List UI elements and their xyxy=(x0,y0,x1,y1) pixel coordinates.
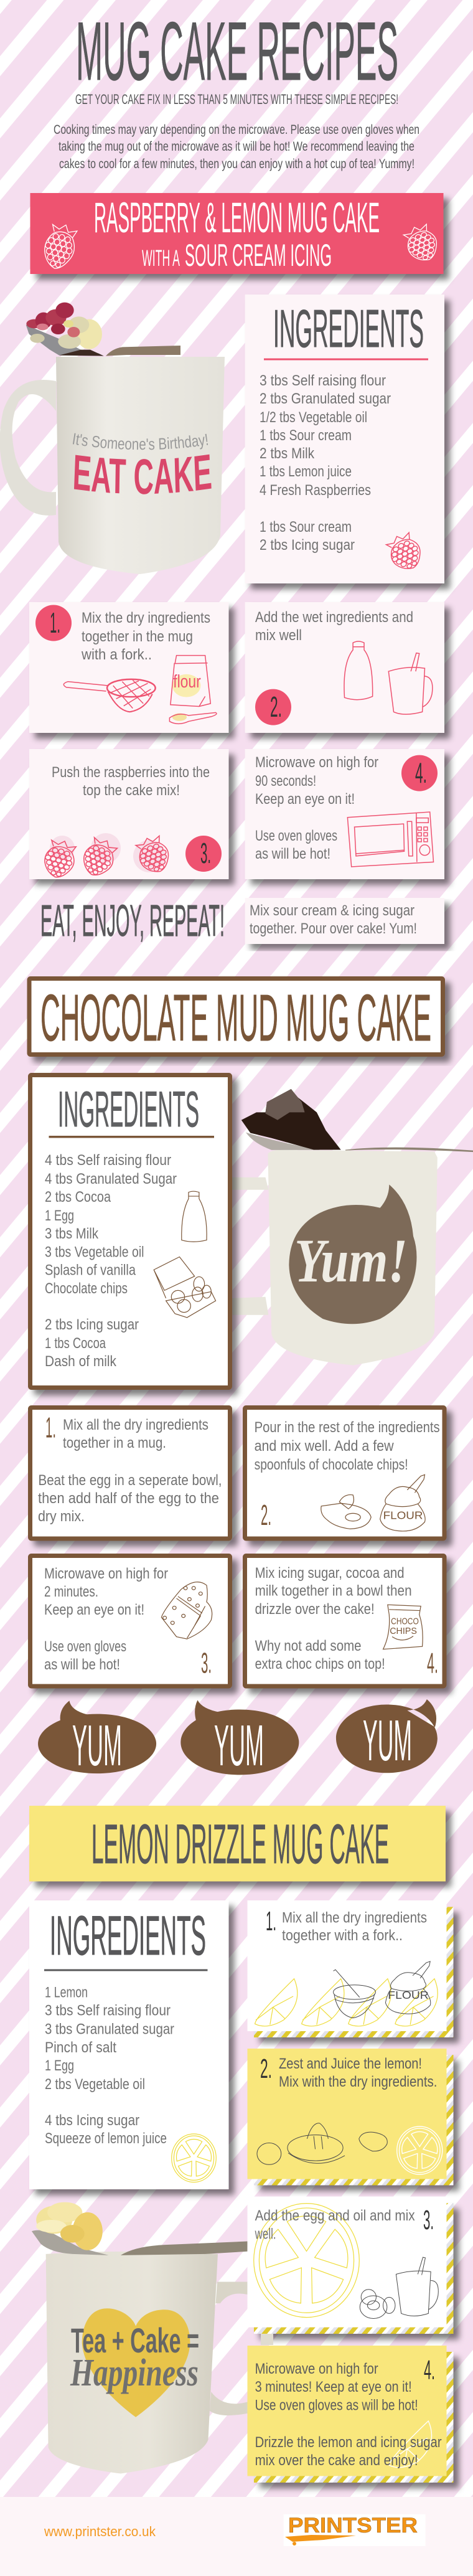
panel: step 3 xyxy=(29,749,229,880)
step text xyxy=(255,1419,440,1473)
icon: white lemon wedge xyxy=(389,2421,432,2468)
panel: chocolate step 4: 4. xyxy=(427,1647,438,1679)
panel: chocolate step 2: 2. xyxy=(261,1499,271,1531)
step text: together with a fork.. xyxy=(282,1927,403,1944)
step text: top the cake mix! xyxy=(83,782,180,799)
step number 4 xyxy=(401,755,438,791)
ingredient list: 2 tbs Vegetable oil xyxy=(45,2076,145,2093)
ingredient list: 1 tbs Sour cream xyxy=(260,427,352,444)
step text: together in the mug xyxy=(82,628,193,645)
step text: Use oven gloves xyxy=(255,828,337,844)
icon: spoon xyxy=(169,712,217,724)
ingredient list: 3 tbs Self raising flour xyxy=(45,2003,171,2019)
ingredient list: 1 tbs Lemon juice xyxy=(260,463,352,480)
step text xyxy=(282,1909,427,1944)
yum bubble 2: YUM xyxy=(214,1713,264,1778)
icons: lemon wedges, bowl, flour: FLOUR xyxy=(388,1989,429,2002)
panel: chocolate banner xyxy=(29,979,443,1055)
icon: sieve xyxy=(63,679,156,712)
panel: lemon step 1 xyxy=(248,1900,453,2037)
intro paragraph xyxy=(54,123,419,171)
panel: lemon step 2 xyxy=(248,2049,453,2186)
step text: 90 seconds! xyxy=(255,773,316,790)
step text: mix over the cake and enjoy! xyxy=(255,2452,418,2469)
mug: eat cake: EAT CAKE xyxy=(74,455,212,494)
yum bubble 1: YUM xyxy=(72,1713,122,1778)
step text xyxy=(255,754,378,862)
icon: raspberry right xyxy=(401,221,443,266)
panel: lemon step 4 xyxy=(248,2346,453,2483)
step text: as will be hot! xyxy=(44,1656,120,1673)
ingredient list: 1 Egg xyxy=(45,2057,74,2074)
website url: www.printster.co.uk xyxy=(44,2524,156,2539)
ingredient list: 3 tbs Milk xyxy=(45,1225,99,1242)
icon: oven glove xyxy=(161,1582,212,1639)
mug text: tea plus cake equals: Tea + Cake = xyxy=(71,2321,199,2360)
icon: microwave xyxy=(347,812,434,867)
step text: Mix all the dry ingredients xyxy=(63,1417,208,1433)
step text: Microwave on high for xyxy=(255,2361,378,2377)
mug text: happiness: Happiness xyxy=(70,2352,199,2394)
panel: step 2 xyxy=(245,602,444,733)
step text xyxy=(279,2055,437,2090)
panel: raspberry ingredients xyxy=(245,295,444,583)
step text: Microwave on high for xyxy=(44,1565,168,1582)
ingredient list: 1 Egg xyxy=(45,1207,74,1224)
ingredient list: 1 tbs Cocoa xyxy=(45,1335,106,1352)
step number 2: 2. xyxy=(270,691,282,723)
ingredient list: 4 Fresh Raspberries xyxy=(260,482,371,499)
icon: choco chips bag xyxy=(383,1605,423,1649)
mug: eat cake xyxy=(0,303,225,574)
icons: juicer and lemon xyxy=(257,2123,387,2164)
step text: mix well xyxy=(255,627,302,644)
ingredient list: 4 tbs Granulated Sugar xyxy=(45,1171,177,1187)
panel: chocolate step 1: 1. xyxy=(45,1411,56,1443)
step text: drizzle over the cake! xyxy=(255,1601,375,1618)
step text xyxy=(255,2207,415,2243)
step text: Add the wet ingredients and xyxy=(255,609,413,626)
ingredient list: 4 tbs Icing sugar xyxy=(45,2112,139,2129)
ingredient list: 2 tbs Icing sugar xyxy=(45,1316,139,1333)
logo: printster: PRINTSTER xyxy=(288,2514,418,2537)
panel: chocolate ingredients xyxy=(30,1075,230,1387)
icon: flour bag xyxy=(171,656,210,706)
step number 1: 1. xyxy=(50,606,60,639)
step text: Add the egg and oil and mix xyxy=(255,2207,415,2224)
step number 3: 3. xyxy=(200,837,211,869)
panel: icing note: together. Pour over cake! Yum! xyxy=(250,920,417,937)
step text: dry mix. xyxy=(38,1508,85,1525)
yum bubble 1 xyxy=(38,1701,156,1778)
ingredient list: 4 tbs Self raising flour xyxy=(45,1152,171,1169)
step text: and mix well. Add a few xyxy=(255,1438,394,1455)
step text xyxy=(81,610,210,663)
speech bubble xyxy=(289,1184,416,1324)
panel: chocolate step 3 xyxy=(30,1555,230,1686)
step text: Mix with the dry ingredients. xyxy=(279,2074,437,2090)
subheading: with a sour cream icing: WITH A xyxy=(142,245,180,271)
panel: lemon step 1: 1. xyxy=(266,1906,276,1937)
ingredient list: Dash of milk xyxy=(45,1353,117,1370)
ingredient list: 1/2 tbs Vegetable oil xyxy=(260,409,367,426)
panel: lemon step 3: 3. xyxy=(423,2205,434,2235)
icon: cracked egg xyxy=(321,1495,371,1529)
step text: Use oven gloves xyxy=(44,1638,126,1655)
step text: together in a mug. xyxy=(63,1435,166,1451)
ingredient list: 2 tbs Milk xyxy=(260,445,315,462)
panel: lemon step 4: 4. xyxy=(424,2355,435,2385)
panel: lemon ingredients xyxy=(29,1900,229,2189)
step text xyxy=(255,609,413,644)
ingredient list: 3 tbs Vegetable oil xyxy=(45,1244,144,1260)
step text: milk together in a bowl then xyxy=(255,1583,412,1599)
subheading: with a sour cream icing xyxy=(142,238,332,273)
yum bubble 2 xyxy=(180,1700,299,1778)
icon: choco chips bag: CHOCO xyxy=(391,1616,419,1626)
step number 3 xyxy=(185,836,222,872)
step text: spoonfuls of chocolate chips! xyxy=(255,1456,408,1473)
step text: Beat the egg in a seperate bowl, xyxy=(39,1472,222,1489)
footer xyxy=(0,2497,473,2576)
ingredient list: Splash of vanilla xyxy=(45,1262,136,1279)
step text: Keep an eye on it! xyxy=(44,1602,144,1618)
step text: extra choc chips on top! xyxy=(255,1656,385,1673)
step number 2: 2. xyxy=(260,2054,272,2084)
ingredient list: 3 tbs Self raising flour xyxy=(260,372,386,389)
text: INGREDIENTS xyxy=(58,1082,199,1138)
panel: step 4 xyxy=(245,749,444,879)
icon: lemon slice xyxy=(172,2134,216,2182)
mug: tea plus cake xyxy=(32,2202,247,2474)
ingredient list: Chocolate chips xyxy=(45,1280,128,1297)
icon: mug xyxy=(388,653,433,714)
step text: with a fork.. xyxy=(81,646,152,663)
ingredient list: 2 tbs Cocoa xyxy=(45,1189,111,1205)
step text: Use oven gloves as will be hot! xyxy=(255,2397,418,2413)
step text: as will be hot! xyxy=(255,846,330,862)
icon: raspberry xyxy=(383,529,426,575)
icons: three raspberries xyxy=(41,833,174,880)
step text xyxy=(255,2361,442,2469)
step number 4: 4. xyxy=(415,757,427,789)
step text xyxy=(44,1565,168,1673)
icon: milk bottle xyxy=(182,1191,207,1242)
text: INGREDIENTS xyxy=(50,1904,206,1966)
step text: 2 minutes. xyxy=(44,1583,98,1600)
step number 1 xyxy=(35,605,72,641)
icon: flour bag: flour xyxy=(173,671,201,691)
icon: large lemon slice xyxy=(254,2204,359,2318)
step text: Why not add some xyxy=(255,1638,362,1654)
panel: icing note xyxy=(245,898,444,944)
panel: chocolate step 3: 3. xyxy=(201,1647,212,1679)
step text xyxy=(38,1417,222,1525)
step text: 3 minutes! Keep at eye on it! xyxy=(255,2379,412,2395)
panel: chocolate step 4 xyxy=(245,1555,444,1686)
icons: lemon wedges, bowl, flour xyxy=(255,1961,438,2026)
icon: flour jar: FLOUR xyxy=(383,1509,423,1522)
step text: Zest and Juice the lemon! xyxy=(279,2055,422,2072)
ingredient list: 1 Lemon xyxy=(45,1984,88,2001)
ingredient list: Pinch of salt xyxy=(45,2039,116,2056)
icon: egg carton xyxy=(154,1257,216,1318)
ingredient list xyxy=(45,1984,174,2147)
panel: lemon step 3 xyxy=(248,2197,453,2345)
mug text: yum: Yum! xyxy=(294,1226,408,1295)
step text xyxy=(255,1565,412,1673)
step text: well. xyxy=(255,2225,276,2243)
icons: mug and eggs xyxy=(360,2257,438,2318)
icon: white lemon slice xyxy=(397,2126,443,2174)
step text: then add half of the egg to the xyxy=(38,1490,219,1507)
ingredient list: 2 tbs Granulated sugar xyxy=(260,390,391,407)
panel: chocolate step 1 xyxy=(30,1407,230,1539)
panel: chocolate step 2 xyxy=(245,1407,444,1539)
logo: printster xyxy=(284,2514,426,2546)
mug: eat cake: It's Someone's Birthday! xyxy=(73,433,208,450)
ingredient list xyxy=(45,1152,177,1370)
step text xyxy=(52,764,210,799)
icon: raspberry left xyxy=(40,221,80,272)
step text: Microwave on high for xyxy=(255,754,378,771)
step text: Mix all the dry ingredients xyxy=(282,1909,427,1926)
icon: choco chips bag: CHIPS xyxy=(390,1626,417,1636)
step number 2 xyxy=(255,689,291,725)
step text: Mix icing sugar, cocoa and xyxy=(255,1565,405,1582)
step text: Push the raspberries into the xyxy=(52,764,210,781)
panel: icing note: Mix sour cream & icing sugar xyxy=(250,902,414,919)
icon: flour jar xyxy=(380,1474,425,1531)
panel: lemon banner xyxy=(29,1806,446,1882)
panel: step 1 xyxy=(29,602,229,733)
step text: Mix the dry ingredients xyxy=(82,610,210,626)
mug: yum xyxy=(232,1089,473,1366)
ingredient list xyxy=(260,372,391,554)
ingredient list: 1 tbs Sour cream xyxy=(260,519,352,535)
yum bubble 3 xyxy=(336,1699,438,1773)
panel: raspberry banner xyxy=(30,193,443,274)
ingredient list: 3 tbs Granulated sugar xyxy=(45,2021,174,2037)
step text: Pour in the rest of the ingredients xyxy=(255,1419,440,1436)
ingredient list: 2 tbs Icing sugar xyxy=(260,537,355,554)
step text: Drizzle the lemon and icing sugar xyxy=(255,2434,442,2451)
icon: bottle xyxy=(344,641,373,700)
step text: Keep an eye on it! xyxy=(255,791,355,808)
ingredient list: Squeeze of lemon juice xyxy=(45,2130,167,2147)
